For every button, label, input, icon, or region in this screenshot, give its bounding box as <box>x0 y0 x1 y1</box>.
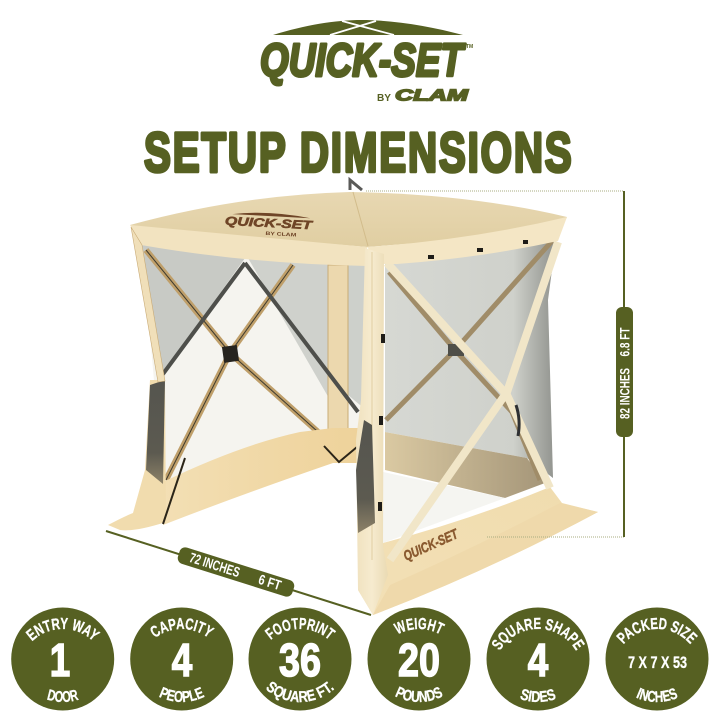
stat badge: weight: WEIGHT <box>392 618 446 634</box>
valance front-right <box>367 217 567 264</box>
height dimension <box>366 191 633 537</box>
title: SETUP DIMENSIONS <box>144 122 572 184</box>
hanging clip <box>516 405 519 436</box>
left wall struts <box>146 250 327 480</box>
stat badge: capacity: 4 <box>172 634 192 686</box>
right skirt and flap <box>358 487 598 615</box>
rolled mesh left <box>146 380 165 484</box>
logo by-line: BY <box>377 92 391 104</box>
stat badge: footprint: SQUARE FT. <box>266 681 334 702</box>
stat badge: packed size <box>606 608 708 710</box>
width label feet: 6 FT <box>257 571 284 593</box>
stat badge: weight <box>368 608 470 710</box>
left corner flap <box>108 380 166 530</box>
pole fold <box>371 252 373 560</box>
height label feet: 6.8 FT <box>616 327 632 356</box>
stat badge: square shape: SQUARE SHAPE <box>492 618 585 651</box>
stat badge: square shape: SIDES <box>520 689 556 702</box>
stat badge: footprint: 36 <box>279 634 321 686</box>
dotted guide lines <box>366 191 624 537</box>
logo: Quick-Set by Clam <box>260 20 473 104</box>
tie-down lines left <box>163 446 357 524</box>
stat badge: packed size: PACKED SIZE <box>616 618 698 644</box>
roof hub left <box>222 345 239 363</box>
stat badge: entry way: 1 <box>50 634 70 686</box>
roof logo by-line: BY CLAM <box>265 231 296 238</box>
stat badge: capacity: CAPACITY <box>150 618 215 637</box>
logo wordmark: QUICK-SET <box>260 34 466 86</box>
tent roof logo <box>224 211 315 239</box>
valance front-left <box>130 225 367 266</box>
roof logo dome <box>232 211 310 218</box>
stat badge: packed size: 7 X 7 X 53 <box>628 654 687 672</box>
right hub <box>448 344 464 356</box>
width dimension <box>106 531 371 615</box>
right wall struts <box>386 241 552 480</box>
stat badge: footprint: FOOTPRINT <box>264 618 336 640</box>
stat badge: packed size: INCHES <box>636 688 678 702</box>
stat badge: footprint <box>248 608 352 710</box>
rear floor band <box>385 432 545 498</box>
width label inches: 72 INCHES <box>188 549 242 580</box>
tent left wall <box>142 245 366 482</box>
width pill <box>176 546 296 598</box>
roof logo wordmark: QUICK-SET <box>225 214 314 232</box>
black tabs <box>378 240 528 511</box>
height pill <box>616 307 633 437</box>
height line <box>623 191 625 537</box>
cream front straps <box>387 242 558 560</box>
height label: 82 INCHES <box>616 368 632 419</box>
roof <box>130 192 567 247</box>
stat badge: entry way: ENTRY WAY <box>25 618 100 642</box>
roof hanger loop <box>350 180 362 190</box>
width line <box>106 531 371 615</box>
left corner post <box>131 227 165 382</box>
stat badge: entry way <box>11 608 114 710</box>
logo dome <box>273 20 463 35</box>
tent right wall <box>383 240 556 543</box>
tent left skirt <box>163 428 360 525</box>
stat badge: square shape <box>486 608 590 710</box>
rolled mesh right <box>356 420 375 533</box>
roof seams <box>353 192 368 246</box>
logo by-line: CLAM <box>395 88 470 104</box>
tent skirt logo: QUICK-SET <box>401 525 461 564</box>
front corner pole <box>356 248 388 615</box>
stat badge: entry way: DOOR <box>47 689 79 702</box>
stat badge: capacity <box>130 608 234 710</box>
tent product illustration <box>108 180 598 615</box>
back corner pole <box>328 265 348 430</box>
interior floor <box>383 472 505 543</box>
stat badge: capacity: PEOPLE <box>159 686 205 702</box>
logo trademark: TM <box>466 44 473 50</box>
stat badge: weight: 20 <box>398 634 440 686</box>
stat badge: weight: POUNDS <box>395 686 442 702</box>
logo by-line <box>377 88 470 104</box>
right skirt shading <box>373 503 598 615</box>
left door flap edges <box>160 263 358 412</box>
stat badge: square shape: 4 <box>528 634 548 686</box>
